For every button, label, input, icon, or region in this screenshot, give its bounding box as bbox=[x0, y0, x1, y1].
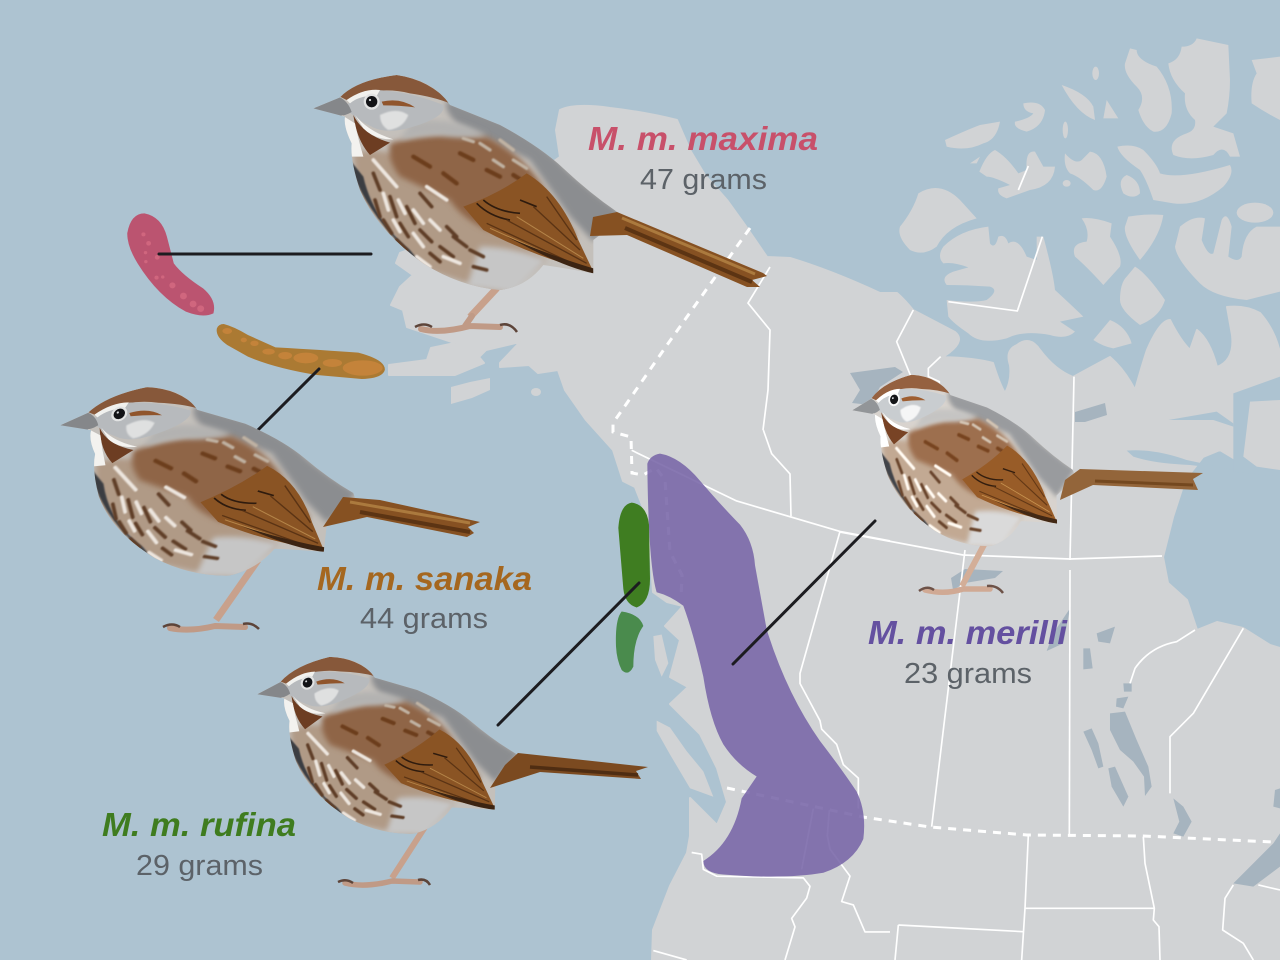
mainland and Alaska bbox=[389, 106, 1280, 960]
Kodiak and coastal islands bbox=[451, 378, 713, 797]
province and state borders bbox=[613, 166, 1280, 960]
label: M. m. rufina bbox=[102, 806, 296, 882]
range: M. m. maxima (red) bbox=[127, 213, 214, 315]
label: M. m. merilli bbox=[868, 614, 1068, 690]
Arctic islands bbox=[899, 38, 1280, 477]
leader line: sanaka bbox=[255, 369, 319, 433]
range: M. m. merilli (purple) bbox=[647, 454, 864, 877]
label: M. m. maxima: M. m. maxima bbox=[588, 120, 818, 157]
leader line: maxima bbox=[159, 252, 371, 256]
label: M. m. sanaka bbox=[317, 560, 532, 635]
bird: M. m. rufina bbox=[242, 620, 648, 885]
label: M. m. rufina: M. m. rufina bbox=[102, 806, 296, 843]
label: M. m. sanaka: 44 grams bbox=[360, 603, 488, 635]
range: M. m. rufina (green) bbox=[616, 503, 650, 673]
lakes bbox=[850, 367, 1280, 887]
leader line: rufina bbox=[498, 583, 639, 725]
label: M. m. maxima: 47 grams bbox=[640, 164, 767, 196]
leader line: merilli bbox=[733, 521, 875, 664]
label: M. m. rufina: 29 grams bbox=[136, 850, 263, 882]
bird: M. m. sanaka bbox=[28, 352, 480, 630]
label: M. m. sanaka: M. m. sanaka bbox=[317, 560, 532, 597]
map: North America land bbox=[389, 38, 1280, 960]
bird: M. m. merilli bbox=[842, 341, 1203, 593]
bird: M. m. maxima bbox=[300, 60, 767, 332]
label: M. m. merilli: 23 grams bbox=[904, 658, 1032, 690]
range: M. m. sanaka (orange) bbox=[217, 324, 385, 379]
dashed international borders bbox=[613, 228, 750, 598]
inland water channels bbox=[1233, 377, 1280, 477]
label: M. m. merilli: M. m. merilli bbox=[868, 614, 1068, 651]
label: M. m. maxima bbox=[588, 120, 818, 196]
